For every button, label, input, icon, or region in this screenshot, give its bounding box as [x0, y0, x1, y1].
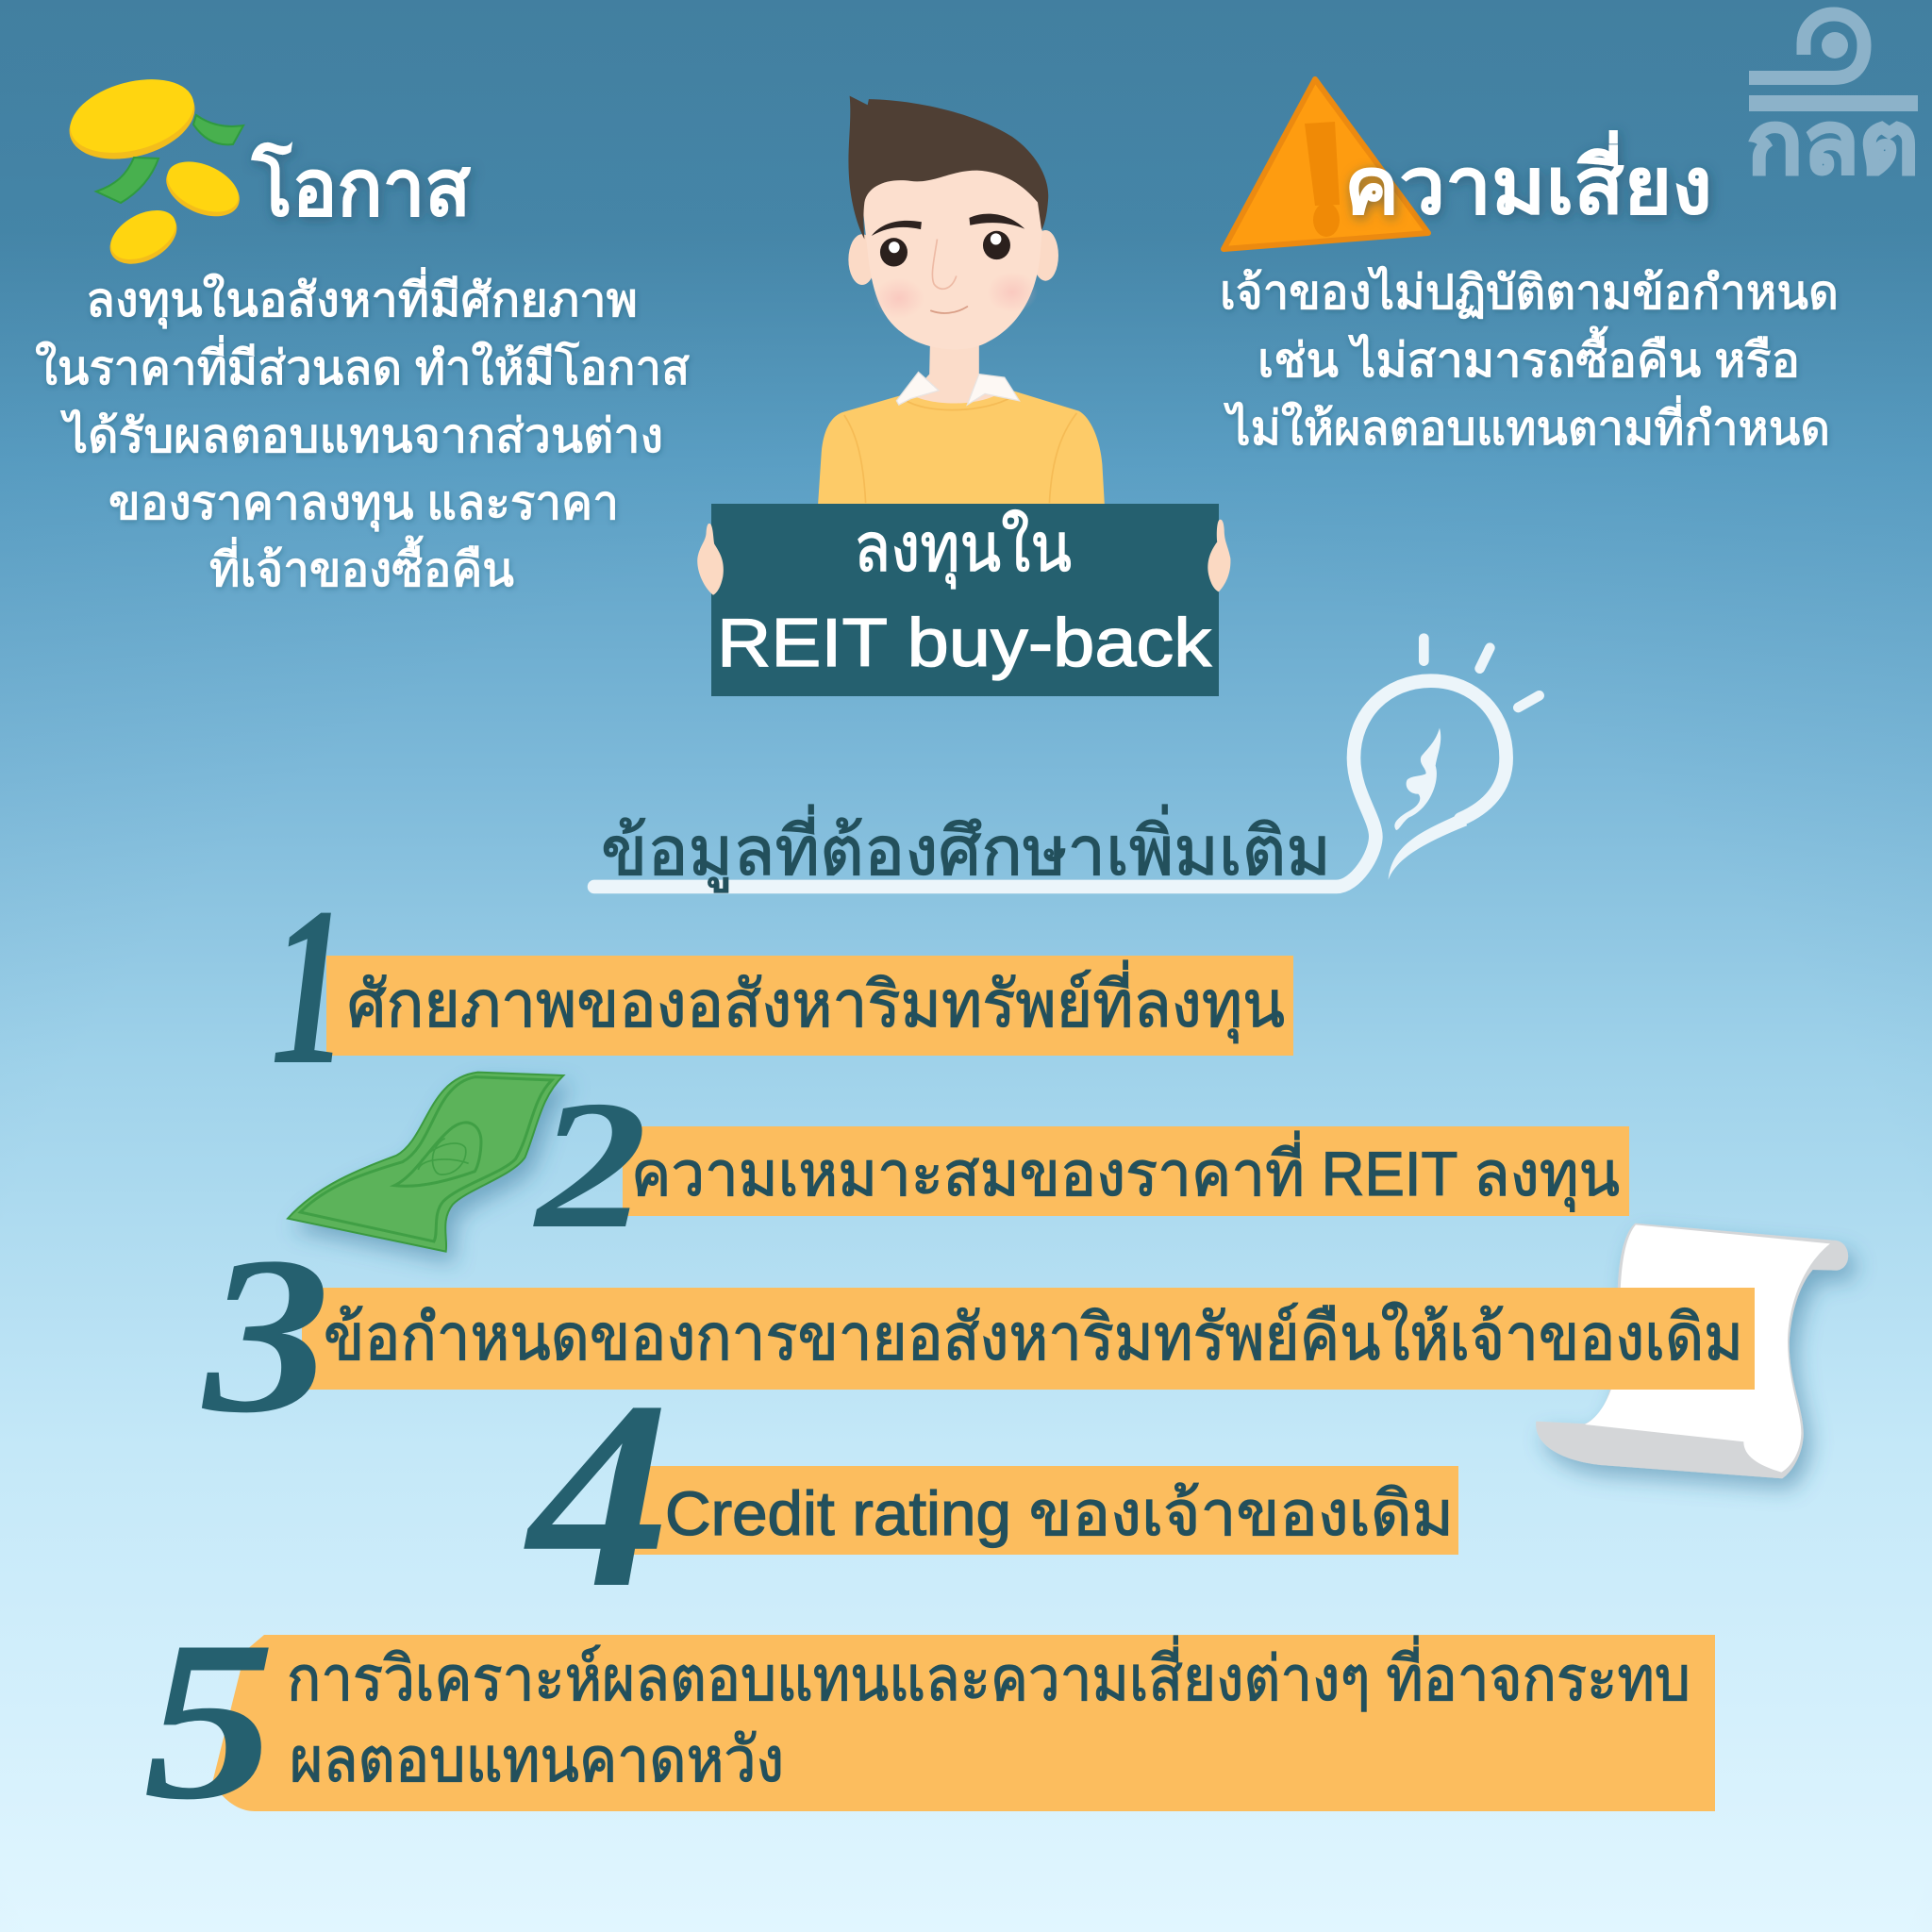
item 2: 2 [532, 1063, 647, 1267]
text block: opportunity: ที่เจ้าของซื้อคืน [209, 536, 514, 596]
sweater [818, 391, 1105, 505]
text block: opportunity: ได้รับผลตอบแทนจากส่วนต่าง [60, 409, 663, 462]
eyes [880, 238, 908, 267]
hair [848, 96, 1048, 239]
icon: light bulb with underline [594, 639, 1540, 887]
item 2: ความเหมาะสมของราคาที่ REIT ลงทุน [631, 1131, 1620, 1212]
cheeks [874, 278, 924, 319]
item 5: ผลตอบแทนคาดหวัง [290, 1724, 784, 1794]
ears [848, 234, 875, 285]
neck [910, 338, 1005, 404]
text block: risk: เช่น ไม่สามารถซื้อคืน หรือ [1257, 326, 1800, 387]
text block: risk [1220, 266, 1839, 455]
sign: ลงทุนใน [854, 509, 1072, 589]
illustration: person [818, 96, 1105, 505]
text block: risk: ไม่ให้ผลตอบแทนตามที่กำหนด [1224, 396, 1830, 455]
logo: SEC Thailand: กลต [1747, 95, 1919, 192]
item 1: 1 [271, 860, 348, 1111]
item 4: 4 [524, 1345, 670, 1643]
logo: SEC Thailand [1747, 14, 1919, 192]
heading: opportunity: โอกาส [252, 143, 471, 232]
icon: coins and banknotes [60, 67, 248, 275]
icon: paper scroll [1536, 1224, 1848, 1478]
item 4 [524, 1345, 1458, 1643]
item 5: การวิเคราะห์ผลตอบแทนและความเสี่ยงต่างๆ ที่อาจกระทบ [287, 1636, 1690, 1713]
text block: opportunity: ของราคาลงทุน และราคา [108, 476, 619, 531]
sign [711, 504, 1219, 696]
sweater folds [844, 396, 1076, 503]
item 1 [271, 860, 1293, 1111]
text block: opportunity: ในราคาที่มีส่วนลด ทำให้มีโอกาส [35, 336, 690, 394]
icon: curled banknote [288, 1073, 563, 1252]
item 3: 3 [202, 1211, 330, 1459]
item 5 [143, 1594, 1715, 1847]
mouth [931, 307, 967, 313]
text block: opportunity [35, 268, 690, 596]
nose [932, 239, 957, 289]
icon: warning triangle [1224, 79, 1428, 249]
collar [896, 372, 1020, 405]
eyebrows [872, 221, 922, 236]
hands holding sign [697, 520, 1230, 595]
text block: risk: เจ้าของไม่ปฏิบัติตามข้อกำหนด [1220, 266, 1839, 319]
item 2 [532, 1063, 1629, 1267]
item 3: ข้อกำหนดของการขายอสังหาริมทรัพย์คืนให้เจ้าของเดิม [324, 1301, 1743, 1374]
text block: opportunity: ลงทุนในอสังหาที่มีศักยภาพ [86, 268, 638, 328]
item 3 [202, 1211, 1755, 1459]
item 1: ศักยภาพของอสังหาริมทรัพย์ที่ลงทุน [347, 960, 1285, 1043]
item 4: Credit rating ของเจ้าของเดิม [665, 1478, 1454, 1548]
section heading: ข้อมูลที่ต้องศึกษาเพิ่มเติม [601, 805, 1331, 892]
sign: REIT buy-back [717, 606, 1212, 681]
heading: risk: ความเสี่ยง [1344, 131, 1712, 230]
item 5: 5 [143, 1594, 275, 1847]
face [861, 154, 1045, 349]
